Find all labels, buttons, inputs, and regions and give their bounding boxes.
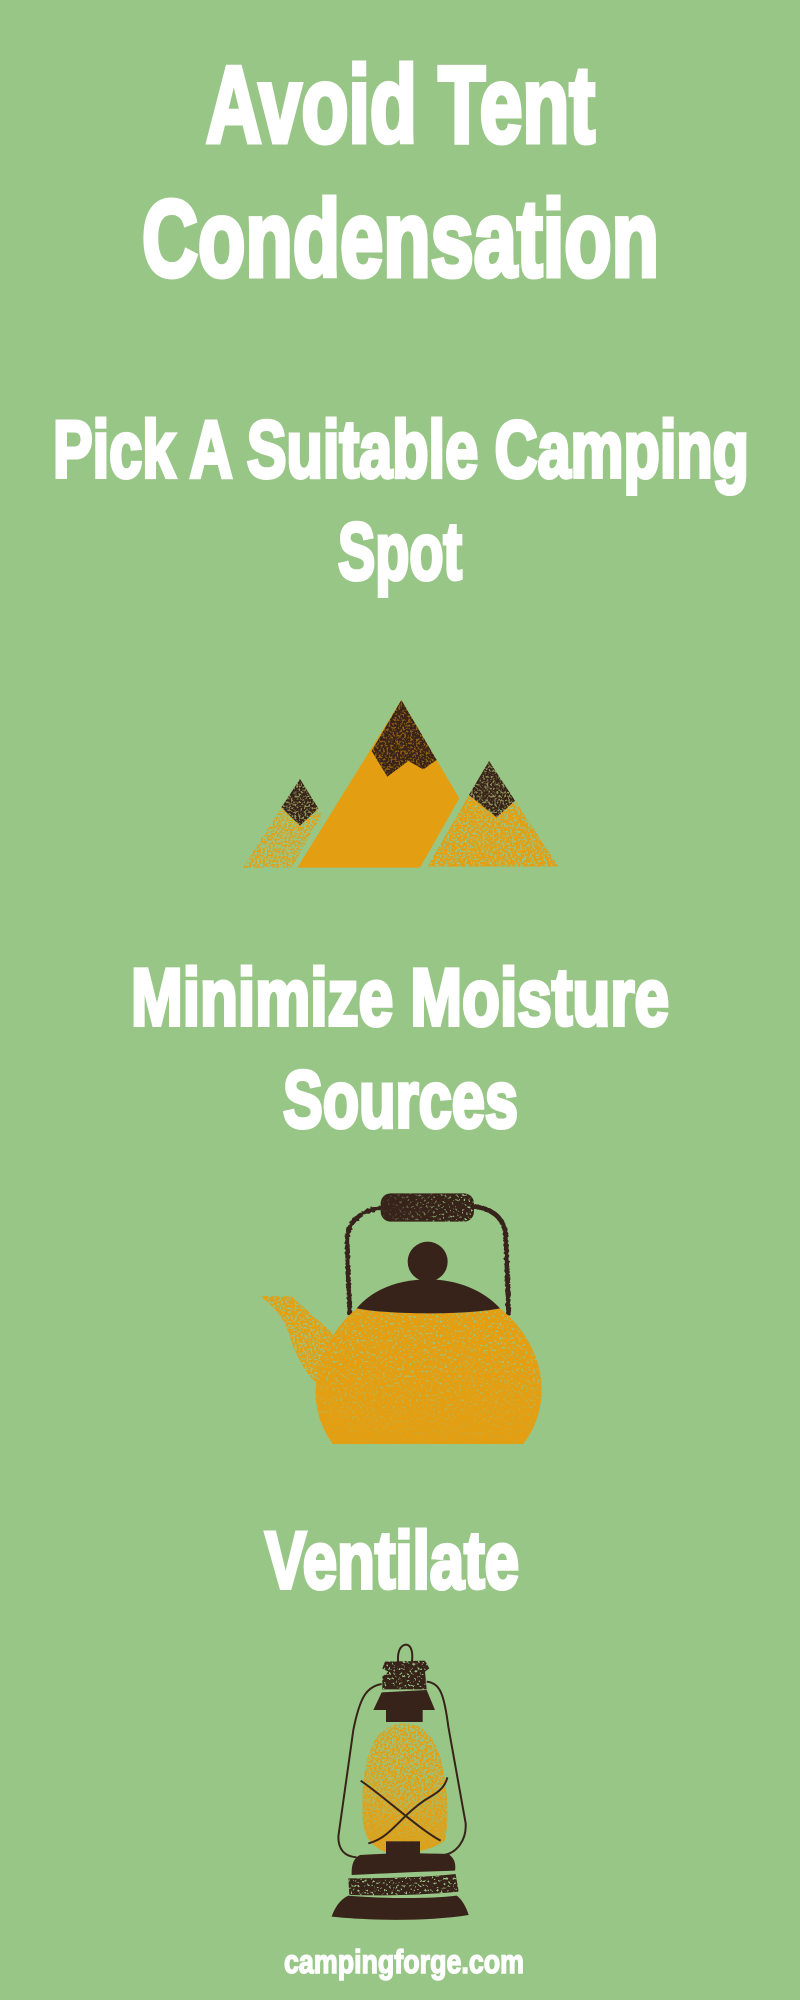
heading: minimize moisture sources	[131, 953, 669, 1145]
title	[142, 44, 659, 300]
lantern base	[352, 1853, 455, 1875]
kettle handle	[347, 1193, 508, 1315]
heading: pick a suitable camping spot: Spot	[338, 507, 462, 597]
lantern cap	[382, 1661, 429, 1689]
footer website: campingforge.com	[284, 1943, 524, 1980]
kettle lid	[357, 1279, 500, 1313]
title: Avoid Tent	[206, 44, 595, 166]
kettle knob	[408, 1242, 448, 1282]
left mountain	[243, 779, 322, 868]
lantern top loop	[398, 1645, 412, 1663]
centre mountain	[297, 700, 459, 868]
icon: mountains	[243, 700, 558, 868]
kettle body	[316, 1308, 542, 1444]
icon: kettle	[260, 1193, 542, 1444]
lantern glass	[362, 1723, 447, 1853]
lantern frame	[338, 1682, 466, 1857]
lantern foot	[332, 1896, 469, 1920]
heading: pick a suitable camping spot	[53, 405, 749, 597]
right mountain	[427, 761, 558, 867]
lantern stem	[386, 1841, 420, 1855]
lantern burner	[373, 1690, 435, 1722]
lantern band	[348, 1874, 459, 1895]
heading: minimize moisture sources: Sources	[283, 1055, 518, 1145]
lantern wire cross	[361, 1777, 447, 1843]
kettle spout	[260, 1296, 340, 1387]
heading: ventilate: Ventilate	[265, 1516, 519, 1606]
icon: lantern	[332, 1645, 469, 1920]
